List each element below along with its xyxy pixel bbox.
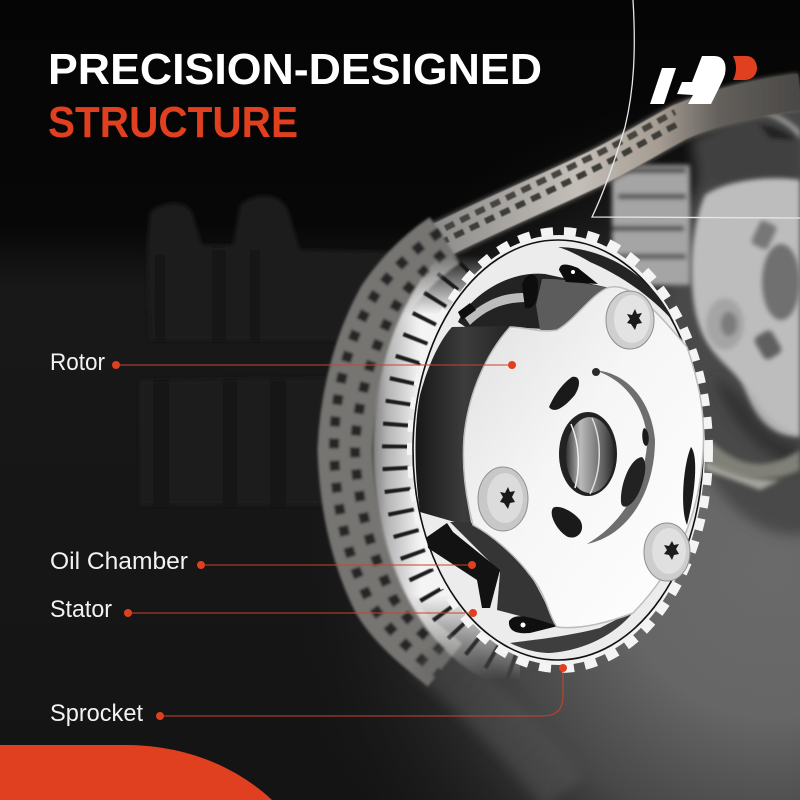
orange corner shape bbox=[0, 745, 272, 800]
callout: oil chamber: Oil Chamber bbox=[50, 548, 188, 575]
disc bbox=[692, 178, 800, 437]
callout: rotor bbox=[50, 349, 516, 376]
slots in plate bbox=[549, 377, 579, 410]
callout: oil chamber bbox=[50, 548, 476, 575]
thin outline frame bbox=[592, 0, 800, 218]
thin dark groove bbox=[413, 240, 703, 660]
bolt, lower left bbox=[478, 467, 528, 531]
oil chamber opening bbox=[427, 523, 500, 608]
callout: stator: Stator bbox=[50, 596, 112, 623]
sprocket gear bbox=[412, 232, 708, 668]
callout: sprocket bbox=[50, 664, 567, 727]
logo bbox=[650, 56, 757, 104]
lower dark rotor bbox=[450, 522, 558, 626]
teeth bbox=[612, 165, 690, 285]
title bbox=[48, 45, 542, 147]
dark rotor band bbox=[416, 326, 512, 527]
timing chain, upper run bbox=[425, 92, 800, 248]
sprocket teeth bbox=[412, 232, 708, 668]
callout: sprocket: Sprocket bbox=[50, 700, 143, 727]
lower crescent bbox=[510, 610, 635, 653]
inner arc groove bbox=[587, 370, 655, 544]
bolt, top bbox=[606, 291, 654, 349]
blurred camshaft in background bbox=[140, 196, 400, 505]
title: STRUCTURE bbox=[48, 98, 298, 147]
blurred sprocket teeth on the left bbox=[372, 257, 520, 676]
callout: rotor: Rotor bbox=[50, 349, 105, 376]
callout: stator bbox=[50, 596, 477, 623]
bolt, lower right bbox=[644, 523, 690, 581]
upper dark crescent bbox=[558, 247, 674, 322]
blurred second gear, upper right bbox=[612, 100, 800, 535]
small slot bbox=[509, 616, 558, 633]
timing chain, blurred around gear bbox=[334, 232, 452, 675]
rotor plate bbox=[463, 287, 704, 628]
upper chamber bbox=[458, 274, 610, 330]
blurred chain, lower run bbox=[430, 655, 565, 795]
sprocket rim bbox=[413, 235, 705, 665]
title: PRECISION-DESIGNED bbox=[48, 45, 542, 94]
centre bore bbox=[559, 412, 617, 496]
